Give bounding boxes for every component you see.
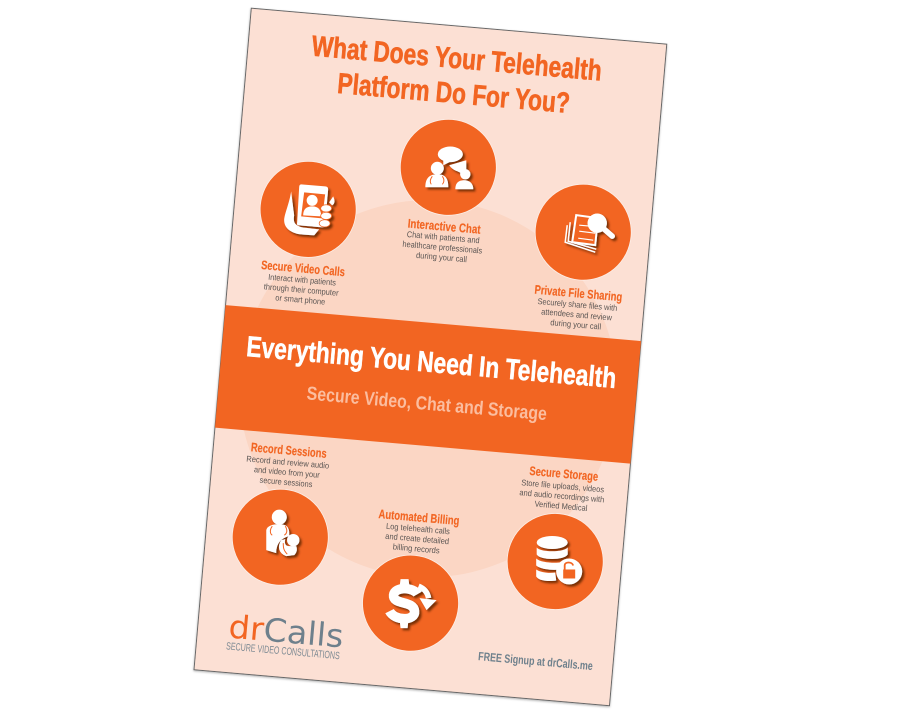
description: automated billing — [384, 521, 451, 556]
band subheading: Secure Video, Chat and Storage — [306, 383, 548, 425]
icon: phone in hand — [284, 184, 335, 235]
poster background — [194, 8, 667, 706]
label: record sessions: Record Sessions — [250, 440, 327, 461]
title: Platform Do For You? — [336, 68, 571, 120]
description: secure storage: Store file uploads, videos — [521, 477, 605, 494]
description: automated billing: and create detailed — [385, 531, 450, 546]
description: automated billing: billing records — [392, 541, 440, 555]
band heading: Everything You Need In Telehealth — [245, 331, 618, 395]
label: secure storage: Secure Storage — [529, 464, 599, 484]
item: secure video calls — [252, 157, 360, 309]
icon: database with lock — [536, 536, 582, 584]
description: secure storage: and audio recordings with — [519, 487, 605, 504]
signup call to action: FREE Signup at drCalls.me — [478, 649, 594, 673]
logo tagline: SECURE VIDEO CONSULTATIONS — [226, 640, 340, 662]
description: private file sharing — [535, 296, 618, 333]
title: What Does Your Telehealth — [310, 31, 603, 88]
description: secure video calls — [263, 271, 340, 308]
title — [307, 31, 603, 122]
orange band — [215, 305, 641, 464]
item: secure storage — [503, 463, 611, 613]
label: secure video calls: Secure Video Calls — [261, 258, 346, 279]
logo: drCalls: drCalls — [227, 608, 345, 655]
label: private file sharing: Private File Sharing — [534, 283, 623, 304]
description: interactive chat: during your call — [416, 250, 467, 264]
label: automated billing: Automated Billing — [378, 507, 460, 528]
item: record sessions — [228, 439, 336, 589]
description: interactive chat: Chat with patients and — [406, 229, 480, 245]
description: record sessions: Record and review audio — [246, 453, 330, 471]
description: private file sharing: during your call — [550, 317, 602, 332]
description: record sessions — [244, 453, 330, 491]
description: secure storage: Verified Medical — [534, 499, 588, 513]
description: private file sharing: attendees and review — [541, 306, 613, 323]
label: interactive chat: Interactive Chat — [407, 217, 482, 237]
description: secure storage — [518, 477, 606, 514]
description: interactive chat — [401, 229, 484, 265]
description: interactive chat: healthcare professionals — [402, 239, 483, 256]
description: secure video calls: Interact with patients — [268, 272, 336, 288]
description: record sessions: and video from your — [254, 464, 320, 480]
description: secure video calls: or smart phone — [275, 292, 326, 307]
item: automated billing — [359, 506, 466, 655]
icon: dollar with arrow — [390, 579, 437, 628]
description: private file sharing: Securely share files with — [537, 296, 618, 313]
item: interactive chat — [392, 115, 500, 266]
icon: files and magnifier — [565, 213, 612, 252]
item: private file sharing — [527, 180, 635, 333]
description: automated billing: Log telehealth calls — [386, 521, 450, 536]
poster — [194, 8, 667, 706]
description: record sessions: secure sessions — [259, 475, 313, 489]
description: secure video calls: through their computer — [263, 281, 339, 298]
central light circle — [233, 185, 624, 592]
icon: doctor with patient — [266, 510, 299, 556]
icon: doctor and patient chat — [425, 146, 473, 189]
